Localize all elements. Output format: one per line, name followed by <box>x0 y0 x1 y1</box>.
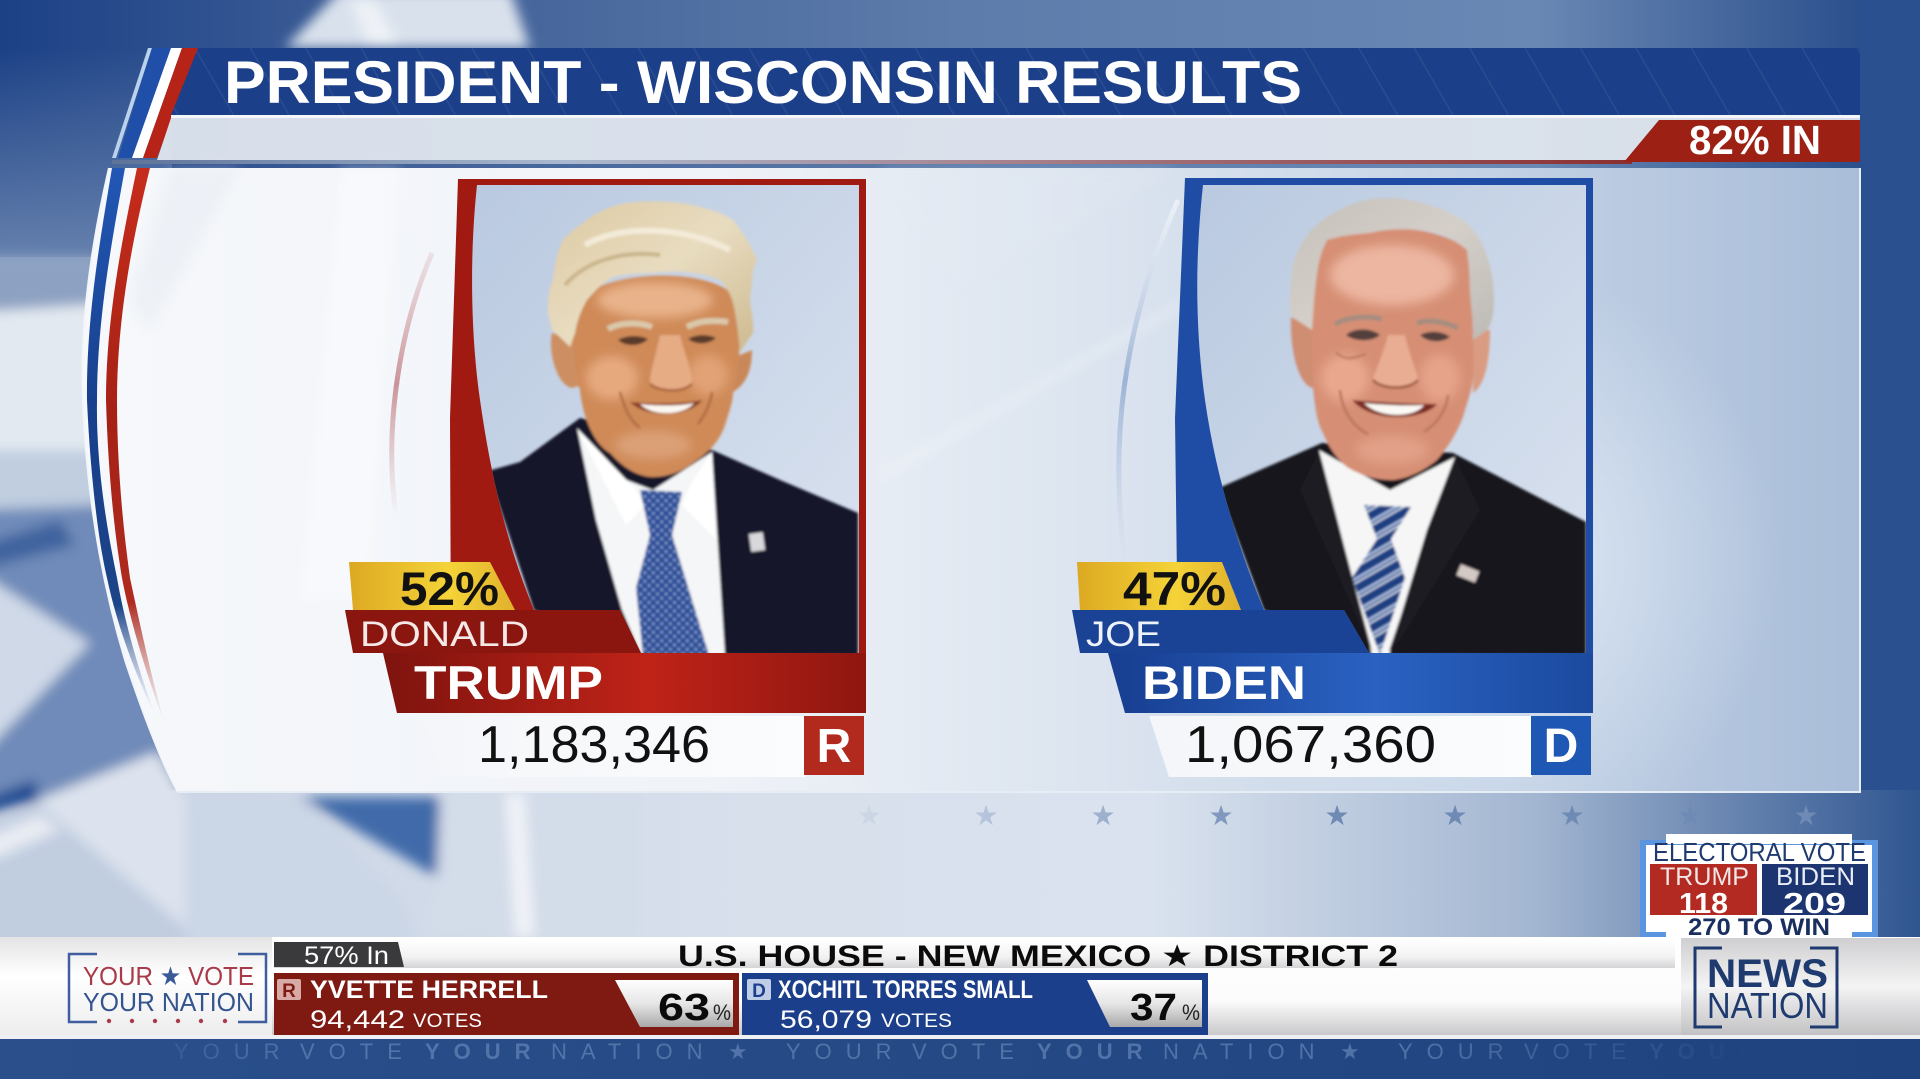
ticker band: ★ <box>728 1040 748 1065</box>
percent badge: 47% <box>1123 562 1226 615</box>
Torres Small result: % <box>1182 1000 1200 1025</box>
percent badge <box>349 562 515 615</box>
surname bar: TRUMP <box>414 656 603 709</box>
Torres Small result: 37 <box>1130 987 1177 1029</box>
left tricolor swoosh <box>82 168 178 792</box>
ticker band: YOUR <box>425 1039 545 1064</box>
Torres Small result: 56,079 <box>780 1006 872 1034</box>
D icon: D <box>752 981 766 1002</box>
percent badge <box>1077 562 1241 615</box>
candidate card: Trump <box>345 179 866 777</box>
Trump electoral count: TRUMP <box>1660 863 1749 891</box>
NewsNation logo <box>1681 938 1920 1035</box>
electoral heading: ELECTORAL VOTE <box>1653 837 1866 867</box>
vote total <box>1149 716 1532 777</box>
vote total: 1,067,360 <box>1185 716 1436 774</box>
ticker band <box>0 1039 1920 1079</box>
your vote your nation logo: YOUR ★ VOTE <box>83 961 254 992</box>
Biden electoral count <box>1762 863 1868 920</box>
Torres Small result: XOCHITL TORRES SMALL <box>778 976 1033 1004</box>
ticker band: YOUR <box>1398 1039 1518 1064</box>
star row: ★ <box>856 799 882 832</box>
percent in tag <box>274 942 404 970</box>
title bar <box>171 48 1860 118</box>
surname bar: BIDEN <box>1142 656 1306 709</box>
82% in tab: 82% IN <box>1689 117 1821 163</box>
Biden electoral count: BIDEN <box>1776 863 1855 891</box>
R icon <box>277 979 301 1002</box>
party badge <box>1531 716 1591 775</box>
main results panel <box>82 168 1860 792</box>
house race header: U.S. HOUSE - NEW MEXICO ★ DISTRICT 2 <box>678 939 1398 974</box>
NewsNation logo: NATION <box>1707 985 1828 1026</box>
blue frame <box>1175 178 1593 660</box>
Herrell result <box>274 973 739 1035</box>
star row: ★ <box>1559 799 1585 832</box>
270 to win: 270 TO WIN <box>1688 914 1830 941</box>
star row: ★ <box>1090 799 1116 832</box>
surname bar <box>1108 653 1593 713</box>
candidate card: Biden <box>1072 178 1593 777</box>
first name: JOE <box>1086 615 1161 654</box>
ticker band: YOUR <box>1649 1039 1769 1064</box>
lower third bar <box>0 937 1920 1039</box>
surname bar <box>383 653 866 713</box>
top stripes <box>112 48 198 158</box>
Torres Small result: VOTES <box>881 1011 952 1032</box>
your vote your nation logo: YOUR NATION <box>83 987 254 1017</box>
ticker band: VOTE <box>300 1039 416 1064</box>
red frame <box>450 179 866 660</box>
vote total <box>422 716 806 777</box>
first name: DONALD <box>360 615 529 654</box>
NewsNation logo: NEWS <box>1707 952 1828 996</box>
Trump electoral count: 118 <box>1679 888 1728 920</box>
Herrell result: % <box>713 1000 731 1025</box>
ticker band: YOUR <box>1037 1039 1157 1064</box>
R icon: R <box>282 981 296 1002</box>
Herrell result: 94,442 <box>310 1006 405 1034</box>
house race header <box>274 939 1675 974</box>
star row: ★ <box>1793 799 1819 832</box>
star row <box>856 799 1819 832</box>
ticker band: ★ <box>1340 1040 1360 1065</box>
Herrell result: YVETTE HERRELL <box>310 976 548 1004</box>
82% in tab <box>1624 117 1860 163</box>
Herrell result: VOTES <box>413 1011 482 1032</box>
Trump electoral count <box>1650 863 1757 920</box>
ticker band: NATION <box>1163 1039 1328 1064</box>
title text: PRESIDENT - WISCONSIN RESULTS <box>224 49 1302 116</box>
vote total: 1,183,346 <box>478 716 710 774</box>
ticker band: VOTE <box>912 1039 1028 1064</box>
party badge <box>804 716 864 775</box>
star row: ★ <box>1324 799 1350 832</box>
portrait: Donald Trump <box>470 185 862 655</box>
your vote your nation logo <box>69 954 266 1023</box>
percent in tag: 57% In <box>304 942 389 970</box>
ticker band: VOTE <box>1524 1039 1640 1064</box>
first name <box>1072 610 1369 654</box>
electoral vote box <box>1640 834 1878 941</box>
ticker band: YOUR <box>174 1039 294 1064</box>
first name <box>345 610 641 654</box>
star row: ★ <box>1208 799 1234 832</box>
portrait: Joe Biden <box>1190 185 1590 655</box>
star row: ★ <box>1677 799 1703 832</box>
Torres Small result <box>742 973 1208 1035</box>
Biden electoral count: 209 <box>1783 888 1846 920</box>
party badge: R <box>817 720 851 773</box>
party badge: D <box>1544 720 1578 773</box>
percent badge: 52% <box>400 562 499 615</box>
ticker band: YOUR <box>786 1039 906 1064</box>
ticker band: NATION <box>551 1039 716 1064</box>
star row: ★ <box>973 799 999 832</box>
precincts reporting strip <box>112 117 1860 164</box>
D icon <box>747 979 771 1002</box>
Herrell result: 63 <box>658 987 710 1029</box>
star row: ★ <box>1442 799 1468 832</box>
